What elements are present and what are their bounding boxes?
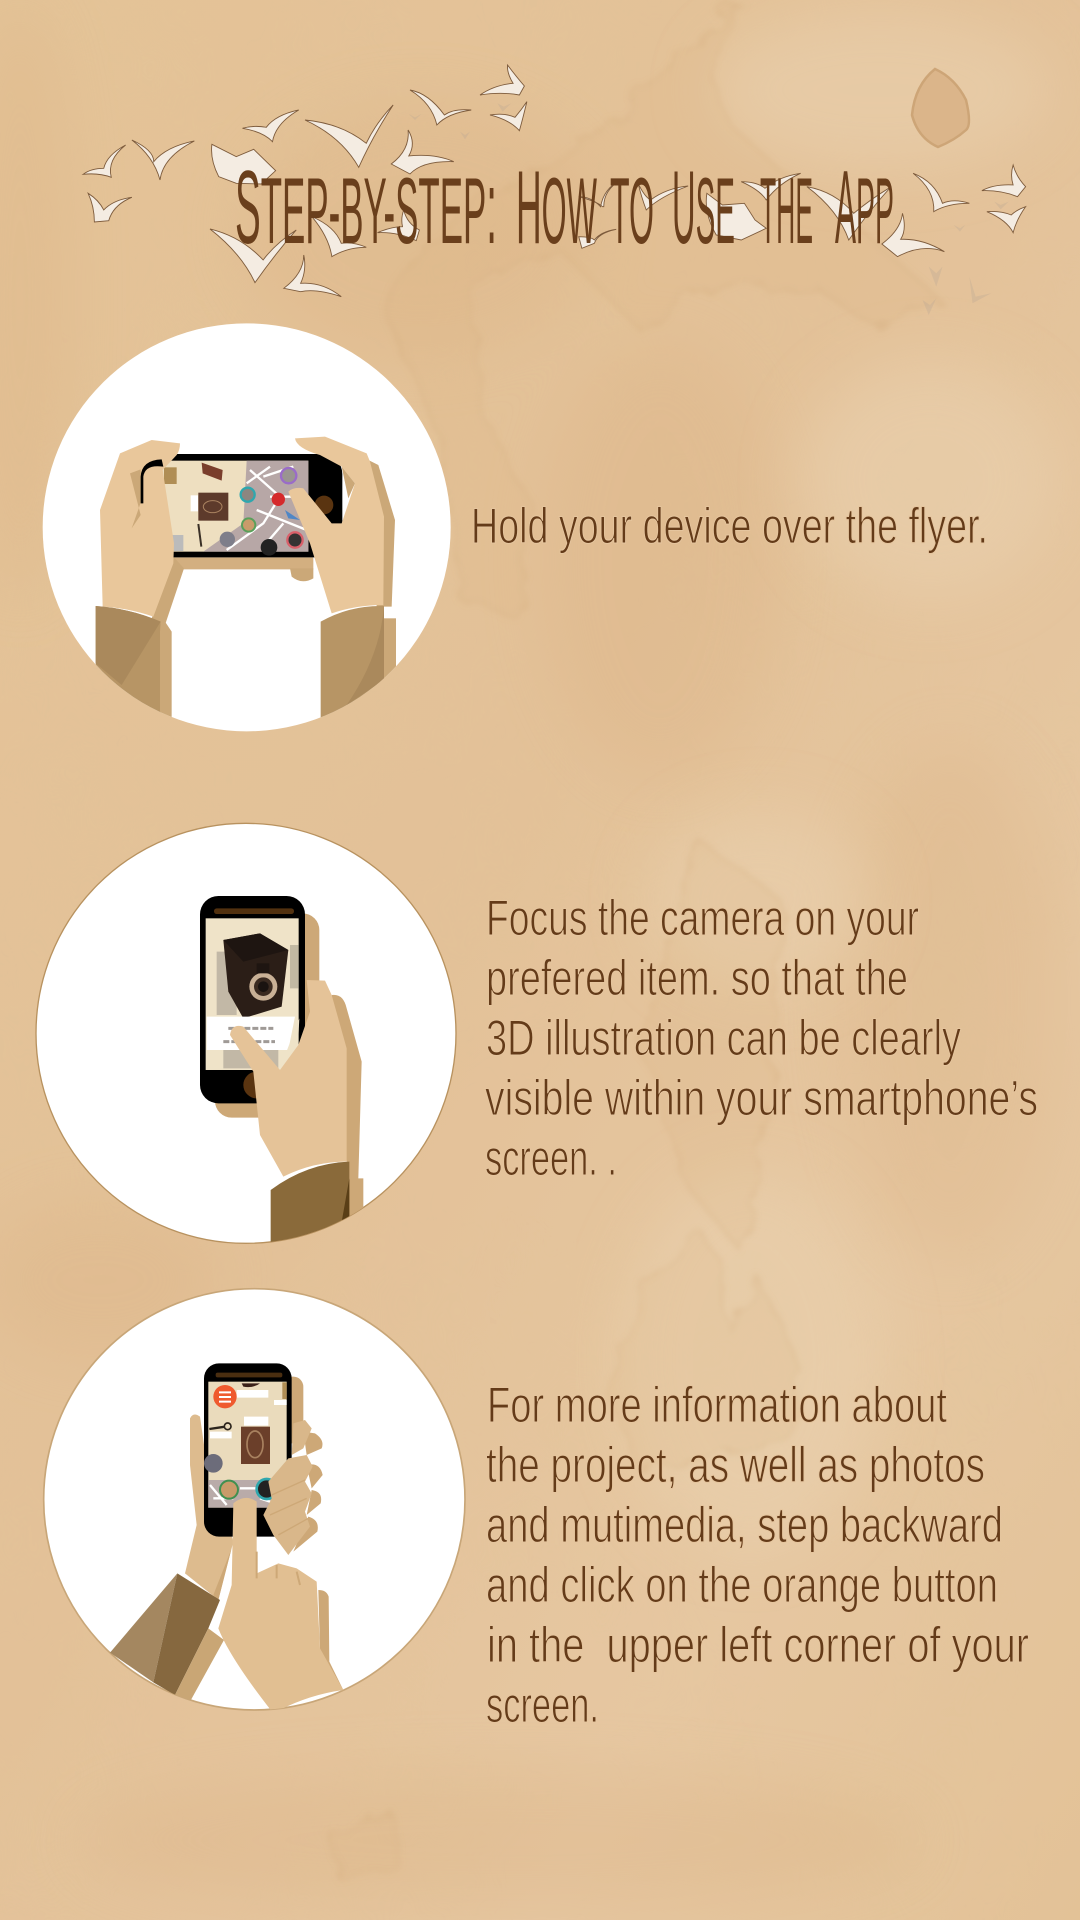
title: THE bbox=[760, 158, 813, 263]
sleeve bbox=[110, 1573, 177, 1682]
white circle bbox=[36, 823, 456, 1243]
right hand bbox=[288, 437, 384, 613]
text: step 2 bbox=[485, 890, 1038, 1186]
phone with camera and hand bbox=[200, 896, 363, 1247]
title: USE bbox=[672, 150, 735, 266]
title: TO bbox=[610, 158, 654, 263]
text: step 3 bbox=[486, 1377, 1029, 1733]
two hands holding landscape phone bbox=[96, 437, 396, 730]
text: step 3: For more information about bbox=[487, 1377, 947, 1433]
flock of paper birds bbox=[83, 65, 1026, 315]
text: step 2: screen. . bbox=[485, 1130, 617, 1186]
sleeves bbox=[96, 606, 161, 712]
panel: step 3 illustration bbox=[44, 1289, 465, 1713]
title: STEP-BY-STEP: bbox=[235, 150, 497, 266]
fingers holding phone bbox=[263, 1420, 323, 1555]
white circle bbox=[43, 323, 451, 731]
left hand bbox=[100, 440, 180, 617]
text: step 2: prefered item. so that the bbox=[486, 950, 908, 1006]
stain: coffee drop bbox=[912, 69, 969, 147]
panel: step 1 illustration bbox=[43, 323, 451, 731]
text: step 2: Focus the camera on your bbox=[486, 890, 919, 946]
text: APP bbox=[835, 150, 894, 266]
panel: step 2 illustration bbox=[36, 823, 456, 1247]
white circle bbox=[44, 1289, 465, 1710]
title: HOW bbox=[516, 150, 597, 266]
pointing hand bbox=[318, 1590, 343, 1690]
text: step 3: screen. bbox=[486, 1677, 599, 1733]
hand bbox=[332, 995, 363, 1220]
button: orange menu bbox=[213, 1385, 237, 1408]
sleeve bbox=[271, 1162, 349, 1247]
hands and phone with orange button bbox=[110, 1363, 343, 1713]
